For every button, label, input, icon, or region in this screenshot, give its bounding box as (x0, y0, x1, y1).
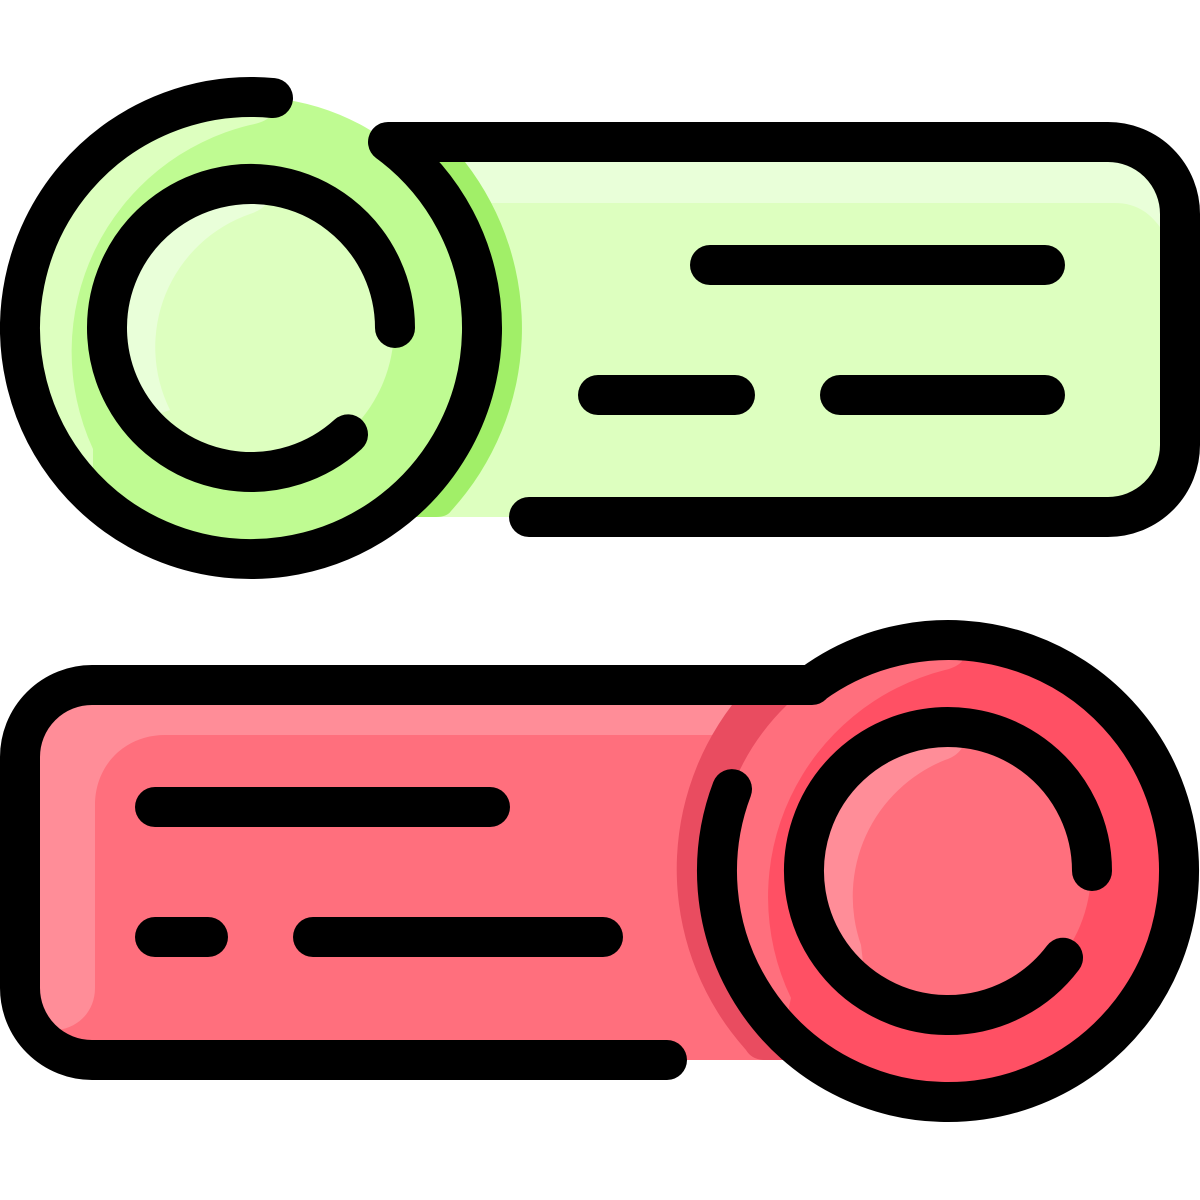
red text line one (155, 787, 490, 827)
red bar and knob outline (20, 640, 1179, 1102)
green text line two short (598, 375, 735, 415)
red inner disc highlight (802, 728, 963, 962)
red knob highlight (717, 640, 963, 1039)
green knob inner ring (107, 184, 395, 472)
red text line two long (313, 917, 603, 957)
green knob highlight (20, 97, 270, 496)
red text line two short (155, 917, 208, 957)
green knob fill (20, 97, 482, 559)
green bar and knob outline (20, 97, 1180, 559)
green text line two long (840, 375, 1045, 415)
green bar top highlight (440, 160, 1162, 230)
red knob fill (717, 640, 1179, 1102)
red knob shadow (677, 705, 800, 1060)
panel: green toggle (20, 97, 1180, 559)
green inner disc highlight (106, 185, 267, 420)
red knob inner disc (805, 728, 1091, 1014)
panel: red toggle (20, 640, 1179, 1102)
green knob inner disc (108, 185, 394, 471)
red bar highlight (38, 700, 760, 1030)
red bar fill (20, 685, 800, 1060)
red knob inner ring (804, 727, 1092, 1015)
green bar fill (400, 142, 1180, 517)
green knob shadow (400, 162, 522, 517)
green text line one (710, 245, 1045, 285)
